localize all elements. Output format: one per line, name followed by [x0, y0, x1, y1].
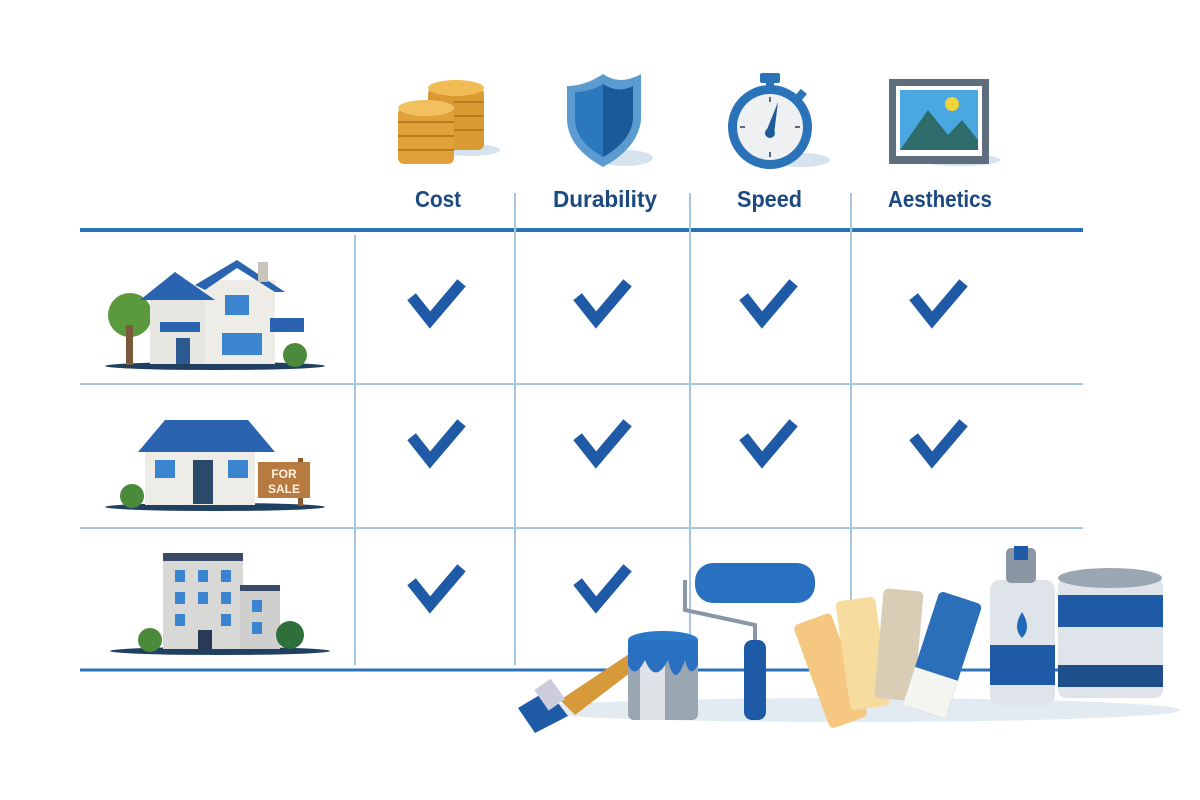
icon: picture frame — [889, 79, 1000, 166]
header labels: Cost — [415, 186, 461, 212]
header labels — [415, 186, 992, 212]
icon: house for sale: FOR — [271, 467, 297, 481]
icon: house 1 — [105, 260, 325, 370]
icon: coins — [398, 80, 500, 164]
header labels: Aesthetics — [888, 186, 992, 212]
grid lines — [80, 193, 1083, 670]
icon: stopwatch — [728, 73, 830, 169]
icon: apartment building — [110, 553, 330, 655]
icon: shield — [567, 74, 653, 167]
checkmarks — [415, 287, 960, 605]
header labels: Speed — [737, 186, 802, 212]
header labels: Durability — [553, 186, 657, 212]
paint tools — [518, 546, 1180, 733]
icon: house for sale — [105, 420, 325, 511]
icon: house for sale: SALE — [268, 482, 300, 496]
